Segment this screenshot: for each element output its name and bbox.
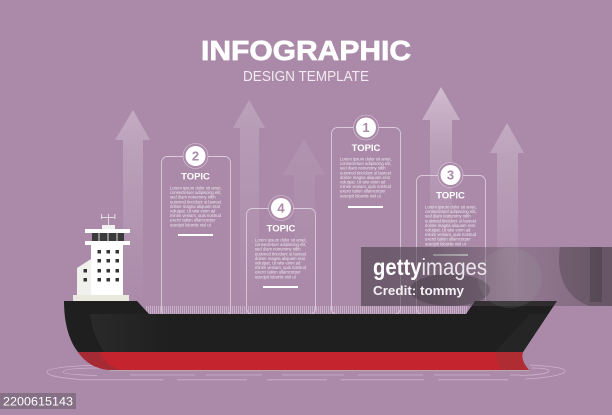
watermark: getty images banner bbox=[361, 247, 612, 308]
panel: topic 1: TOPIC bbox=[352, 143, 381, 154]
panel: topic 2: sed diam nonummy nibh bbox=[170, 195, 216, 200]
panel: topic 4: TOPIC bbox=[267, 224, 296, 234]
panel: topic 3: euismod tincidunt ut laoreet bbox=[425, 218, 477, 223]
title: INFOGRAPHIC bbox=[201, 35, 411, 66]
arrow: background arrow 2 bbox=[233, 100, 265, 305]
arrow: background arrow 3 bbox=[283, 139, 325, 290]
panel: topic 1: euismod tincidunt ut laoreet bbox=[340, 170, 392, 175]
panel: topic 1 bbox=[332, 115, 400, 314]
panel: topic 3: TOPIC bbox=[436, 190, 465, 202]
panel: topic 1: exerci tation ullamcorper bbox=[340, 189, 386, 194]
panel: topic 3: 3 bbox=[447, 168, 454, 183]
arrow: background arrow 4 bbox=[422, 87, 460, 290]
panel: topic 1: consectetuer adipiscing elit, bbox=[340, 161, 391, 166]
panel: topic 1: suscipit lobortis nisl ut bbox=[340, 193, 382, 198]
panel: topic 3: suscipit lobortis nisl ut bbox=[425, 241, 467, 246]
panel: topic 2: TOPIC bbox=[181, 172, 210, 182]
panel: topic 3: Lorem ipsum dolor sit amet, bbox=[425, 204, 477, 210]
panel: topic 1: sed diam nonummy nibh bbox=[340, 166, 386, 171]
arrow: background arrow 5 bbox=[490, 123, 524, 305]
panel: topic 4: exerci tation ullamcorper bbox=[255, 270, 301, 275]
ship deck railing bbox=[145, 306, 467, 314]
subtitle: DESIGN TEMPLATE bbox=[243, 69, 369, 85]
panel: topic 1: Lorem ipsum dolor sit amet, bbox=[340, 156, 392, 162]
panel: topic 4: 4 bbox=[277, 201, 285, 216]
panel: topic 2: Lorem ipsum dolor sit amet, bbox=[170, 186, 222, 190]
panel: topic 4: sed diam nonummy nibh bbox=[255, 247, 301, 252]
panel: topic 4 bbox=[246, 196, 316, 314]
panel: topic 2: dolore magna aliquam erat bbox=[170, 204, 221, 209]
watermark: image number: 2200615143 bbox=[3, 396, 73, 408]
panel: topic 3: consectetuer adipiscing elit, bbox=[425, 209, 476, 214]
panel: topic 4: consectetuer adipiscing elit, bbox=[255, 242, 306, 247]
panel: topic 4: dolore magna aliquam erat bbox=[255, 256, 306, 261]
panel: topic 4: Lorem ipsum dolor sit amet, bbox=[255, 238, 307, 242]
arrow: background arrow 1 bbox=[115, 110, 150, 305]
panel: topic 3: sed diam nonummy nibh bbox=[425, 214, 471, 219]
panel: topic 3: minim veniam, quis nostrud bbox=[425, 232, 477, 237]
panel: topic 2: suscipit lobortis nisl ut bbox=[170, 222, 212, 227]
panel: topic 2: euismod tincidunt ut laoreet bbox=[170, 199, 222, 204]
panel: topic 4: euismod tincidunt ut laoreet bbox=[255, 251, 307, 256]
panel: topic 3: volutpat. Ut wisi enim ad bbox=[425, 228, 471, 232]
ship hull bbox=[64, 301, 557, 371]
ship superstructure bbox=[73, 214, 130, 301]
panel: topic 1: volutpat. Ut wisi enim ad bbox=[340, 180, 386, 184]
panel: topic 2: exerci tation ullamcorper bbox=[170, 218, 216, 223]
panel: topic 2: 2 bbox=[192, 149, 199, 164]
panel: topic 3: dolore magna aliquam erat bbox=[425, 223, 476, 228]
water ripples bbox=[47, 365, 565, 380]
panel: topic 2: consectetuer adipiscing elit, bbox=[170, 190, 221, 195]
panel: topic 1: 1 bbox=[362, 120, 370, 135]
panel: topic 2 bbox=[162, 144, 230, 316]
panel: topic 4: minim veniam, quis nostrud bbox=[255, 265, 307, 270]
watermark: getty images banner: Credit: tommy bbox=[373, 283, 465, 298]
panel: topic 3: exerci tation ullamcorper bbox=[425, 237, 471, 242]
panel: topic 3 bbox=[416, 162, 486, 314]
panel: topic 2: minim veniam, quis nostrud bbox=[170, 213, 222, 218]
panel: topic 4: volutpat. Ut wisi enim ad bbox=[255, 260, 301, 266]
panel: topic 1: dolore magna aliquam erat bbox=[340, 175, 391, 180]
panel: topic 1: minim veniam, quis nostrud bbox=[340, 184, 392, 189]
watermark: image number bbox=[0, 393, 76, 409]
panel: topic 4: suscipit lobortis nisl ut bbox=[255, 274, 297, 279]
watermark: getty images banner: gettyimages bbox=[373, 254, 487, 280]
panel: topic 2: volutpat. Ut wisi enim ad bbox=[170, 208, 216, 214]
